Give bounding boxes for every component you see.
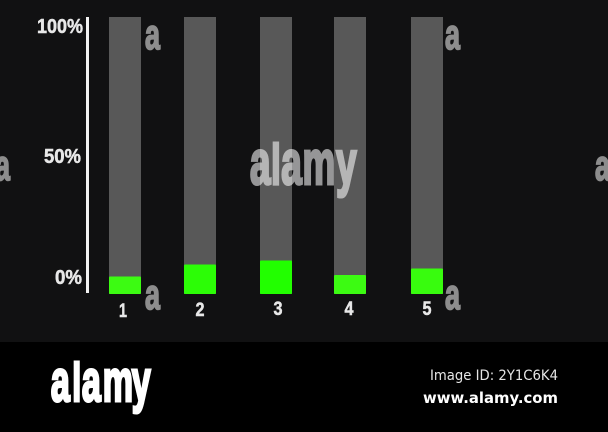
x axis labels (119, 299, 432, 322)
footer logo: l (72, 353, 81, 413)
label: 2: 2 (196, 300, 204, 321)
watermark: centre logo: m (303, 128, 335, 197)
panel: footer strip (0, 342, 608, 432)
watermark: centre logo: y (336, 128, 357, 197)
label: 5: 5 (422, 299, 432, 320)
footer logo: y (132, 350, 151, 414)
bar 2 (184, 17, 216, 294)
watermark: small letters (0, 11, 608, 319)
bar 5 track (411, 17, 443, 294)
watermark letter top left: a (145, 11, 161, 59)
footer logo: a (82, 350, 101, 414)
watermark letter bottom right: a (445, 271, 461, 319)
footer website: www.alamy.com (423, 389, 558, 407)
label: 0%: 0% (55, 267, 82, 289)
footer logo: a (51, 350, 70, 414)
label: 100%: 100% (37, 16, 83, 38)
bar 1 value (109, 276, 141, 294)
panel: chart background (0, 0, 608, 342)
bar 3 track (260, 17, 292, 294)
label: 1: 1 (119, 301, 127, 322)
watermark: centre logo: a (281, 128, 302, 197)
watermark: centre logo: l (271, 133, 281, 196)
y axis labels (37, 16, 83, 289)
bar 3 value (260, 260, 292, 294)
bar 4 value (334, 275, 366, 294)
bar 1 track (109, 17, 141, 294)
bar 3 (260, 17, 292, 294)
label: 3: 3 (274, 299, 282, 320)
bar 4 track (334, 17, 366, 294)
bar 1 (109, 17, 141, 294)
bar 2 track (184, 17, 216, 294)
bar 5 value (411, 268, 443, 294)
watermark letter top right: a (445, 11, 461, 59)
bar 5 (411, 17, 443, 294)
label: 4: 4 (344, 299, 354, 320)
watermark: centre logo: a (250, 128, 271, 197)
y axis line (86, 17, 89, 293)
footer image id: Image ID: 2Y1C6K4 (430, 368, 558, 384)
label: 50%: 50% (44, 146, 81, 168)
footer logo: m (103, 350, 133, 414)
bar 4 (334, 17, 366, 294)
bar 2 value (184, 264, 216, 294)
watermark letter bottom left: a (145, 271, 161, 319)
